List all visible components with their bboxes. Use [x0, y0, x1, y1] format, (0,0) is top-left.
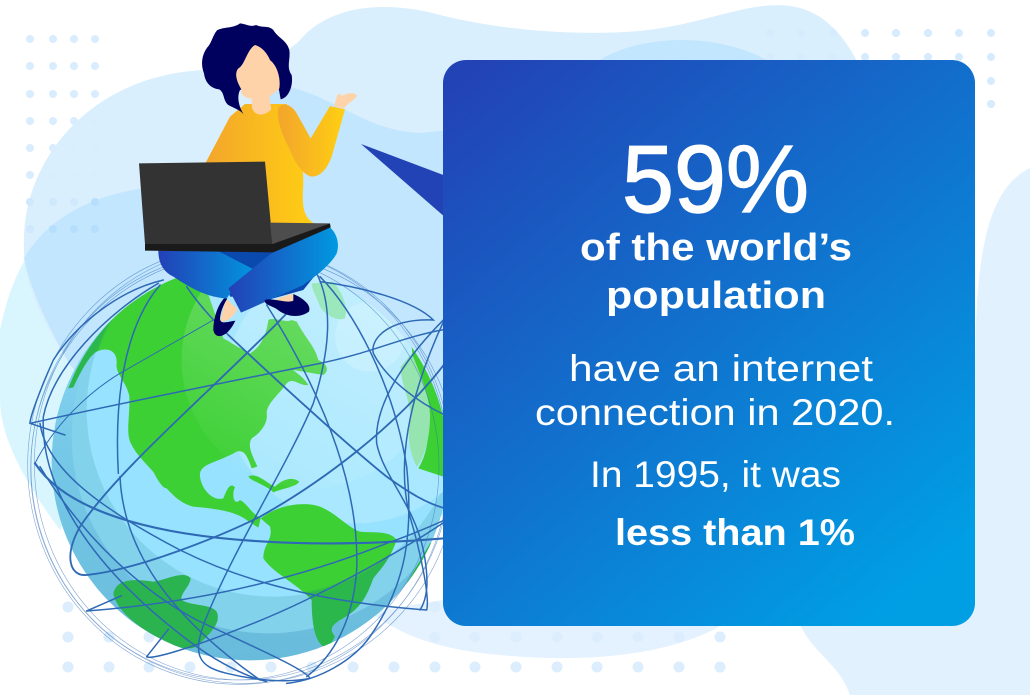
land: Baja [153, 472, 166, 488]
laptop keyboard [270, 223, 330, 247]
hair [202, 23, 292, 117]
body text: connection in 2020. [535, 392, 895, 433]
trousers back [218, 250, 317, 298]
right leg [228, 227, 338, 313]
bold subheading [580, 227, 852, 317]
neck and face [236, 45, 280, 115]
bold closing stat: less than 1% [615, 512, 855, 553]
dots top right [766, 29, 995, 108]
land: pale north [312, 282, 346, 319]
network wires [28, 246, 457, 684]
right foot [275, 293, 293, 304]
bold subheading: of the world’s [580, 227, 852, 269]
laptop edge [145, 223, 331, 252]
headline stat: 59% [622, 126, 809, 233]
laptop screen [139, 162, 273, 244]
right shoe [265, 294, 310, 316]
person with laptop [139, 23, 357, 336]
land: Africa [412, 347, 443, 476]
speech bubble tail [361, 144, 446, 218]
land: southern continent [113, 575, 218, 648]
land: South America [261, 504, 397, 648]
land: Africa pale [401, 353, 430, 467]
land: Caribbean [248, 475, 299, 492]
body text: In 1995, it was [590, 454, 841, 495]
globe [52, 275, 443, 660]
land: lower right [406, 542, 432, 584]
dots bottom [62, 602, 726, 672]
dots top left [26, 35, 99, 233]
hand [334, 93, 357, 109]
sweater body [205, 104, 314, 252]
land: North America [68, 270, 327, 528]
bold subheading: population [606, 275, 826, 317]
body text [535, 348, 895, 495]
land: Greenland [320, 263, 377, 297]
left foot [220, 298, 237, 322]
speech bubble panel [443, 60, 975, 626]
left leg [158, 251, 258, 299]
raised arm [278, 104, 345, 177]
body text: have an internet [569, 348, 874, 389]
globe highlight [182, 276, 412, 484]
left shoe [213, 298, 235, 336]
